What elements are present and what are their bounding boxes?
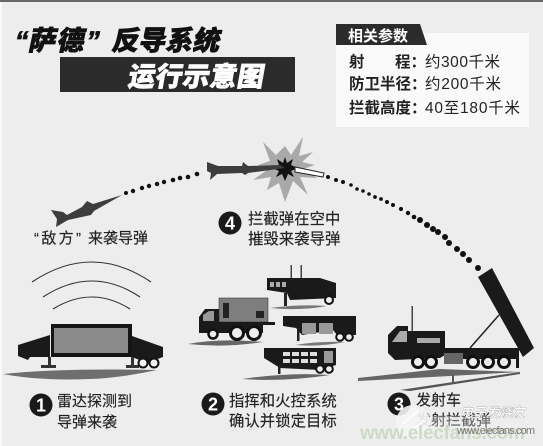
icon: interceptor missile (295, 167, 324, 177)
subtitle banner (60, 57, 295, 92)
step 2 (202, 392, 337, 430)
step 2: 确认并锁定目标 (229, 412, 337, 430)
parameter: intercept altitude: 拦截高度： (349, 98, 427, 117)
step 4 (218, 210, 340, 248)
step 3: 3 (394, 394, 404, 414)
panel: parameters (336, 24, 529, 127)
title (12, 25, 224, 56)
icon: explosion (253, 137, 317, 202)
label: enemy missile: “敌方” (34, 230, 81, 247)
step 1: 导弹来袭 (57, 414, 117, 431)
dotted trajectory: incoming (124, 172, 199, 195)
icon: target missile (207, 162, 285, 180)
step 1: 1 (36, 396, 46, 416)
title: 反导系统 (110, 25, 224, 56)
parameter: intercept altitude (349, 98, 520, 117)
icon: command truck (188, 298, 275, 346)
icon: radar waves (32, 262, 151, 309)
parameter: guard radius (349, 74, 501, 93)
label: enemy missile (34, 230, 148, 247)
watermark: 电子发烧友 (460, 405, 527, 420)
step 4: 4 (225, 214, 235, 234)
step 3: 发射拦截弹 (416, 412, 491, 429)
icon: missile rack trailer (242, 348, 336, 380)
dotted trajectory: interceptor (326, 175, 481, 271)
icon: incoming missile (51, 195, 122, 227)
parameters header (336, 24, 427, 45)
parameter: guard radius: 防卫半径： (349, 74, 427, 93)
step 1 (30, 393, 132, 431)
parameter: range (349, 53, 500, 71)
label: enemy missile: 来袭导弹 (88, 230, 148, 247)
icon: radar vehicle (3, 324, 163, 379)
step 3: 发射车 (416, 392, 461, 409)
icon: radar-linked trailer (267, 265, 336, 309)
watermark: www.elecfans.com (456, 425, 535, 437)
parameter: range: 约300千米 (425, 53, 500, 71)
icon: control trailer (283, 316, 356, 346)
parameter: range: 射 (349, 53, 365, 71)
step 1: 雷达探测到 (57, 393, 132, 410)
watermark: www.elecfans.com (359, 423, 525, 444)
step 4: 拦截弹在空中 (248, 210, 340, 228)
subtitle banner: 运行示意图 (126, 61, 267, 92)
step 3 (388, 392, 491, 429)
step 2: 指挥和火控系统 (229, 392, 337, 410)
step 2: 2 (208, 394, 218, 414)
parameters header: 相关参数 (348, 27, 408, 45)
icon: launcher truck (358, 268, 534, 391)
step 4: 摧毁来袭导弹 (248, 230, 340, 248)
parameter: range: 程： (395, 53, 426, 71)
title: “萨德” (12, 25, 103, 56)
parameter: guard radius: 约200千米 (425, 75, 501, 93)
parameter: intercept altitude: 40至180千米 (425, 99, 520, 117)
watermark (355, 405, 543, 446)
